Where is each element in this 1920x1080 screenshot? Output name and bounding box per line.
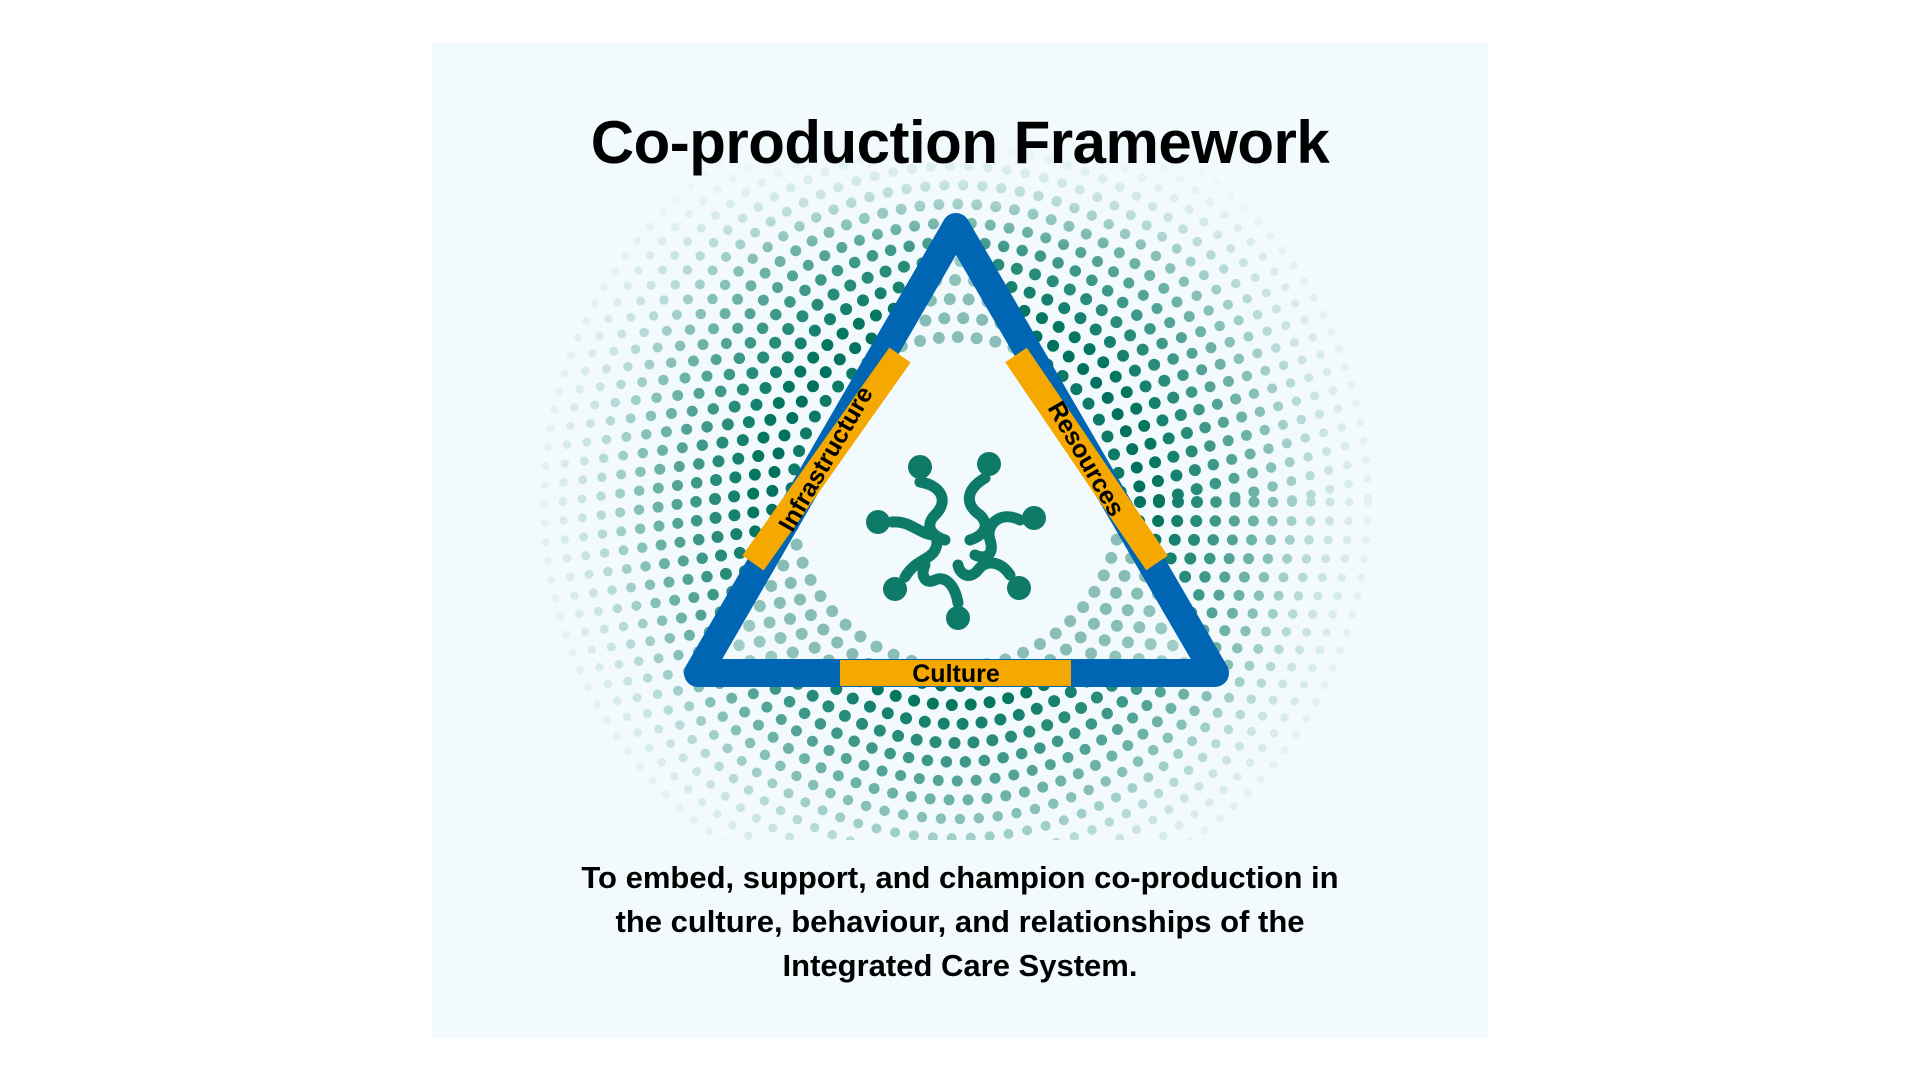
- subtitle text: the culture, behaviour, and relationships of the: [616, 904, 1304, 939]
- dot halo: [540, 154, 1372, 840]
- subtitle text: To embed, support, and champion co-production in: [581, 860, 1339, 895]
- triangle interior: [698, 227, 1215, 673]
- label: Resources: [1016, 355, 1157, 563]
- icon: people circle: [866, 452, 1046, 630]
- label: Resources: Resources: [1042, 397, 1130, 521]
- label: Infrastructure: [753, 355, 900, 563]
- subtitle text: Integrated Care System.: [783, 948, 1137, 983]
- background panel: [432, 43, 1488, 1038]
- dotted halo and triangle diagram: [540, 154, 1372, 840]
- title: Co-production Framework: [591, 109, 1329, 176]
- subtitle text: [581, 860, 1339, 983]
- label: Infrastructure: Infrastructure: [773, 382, 879, 536]
- label: Culture: Culture: [912, 660, 1000, 688]
- triangle frame: [698, 227, 1215, 688]
